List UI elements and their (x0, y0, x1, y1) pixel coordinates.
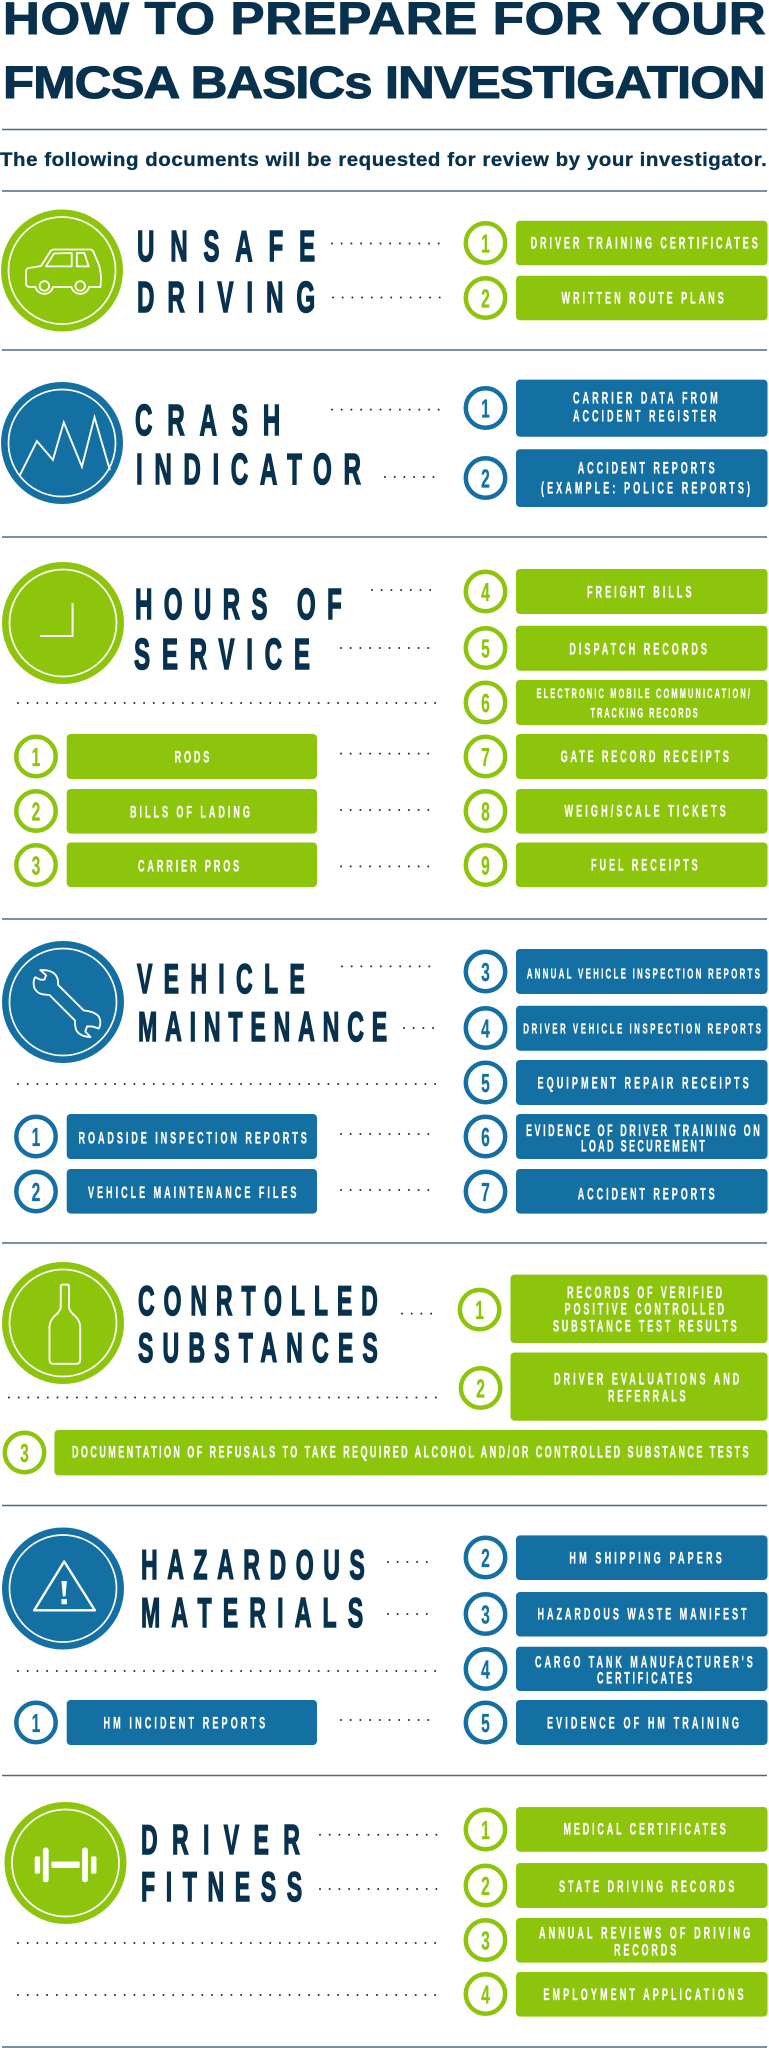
panel: vehicle maintenance (2, 941, 768, 1214)
item 8: weigh/scale tickets (466, 789, 768, 834)
item 3: annual vehicle inspection reports (466, 949, 768, 994)
item 1: driver training certificates (466, 221, 768, 265)
item 2: hm shipping papers: HM SHIPPING PAPERS (569, 1549, 722, 1567)
item 7: gate record receipts: GATE RECORD RECEIPTS (561, 747, 729, 766)
item 3: annual vehicle inspection reports: 3 (481, 958, 490, 987)
item 2: accident reports: 2 (481, 464, 490, 494)
item 3: hazardous waste manifest: 3 (481, 1600, 490, 1630)
item 7: accident reports (466, 1169, 768, 1214)
item 1: roadside inspection reports: 1 (32, 1123, 40, 1152)
item 1: medical certificates: MEDICAL CERTIFICATES (564, 1820, 726, 1838)
heading: driver fitness: DRIVER (141, 1817, 300, 1864)
item 2: vehicle maintenance files: 2 (32, 1178, 40, 1207)
item 4: cargo tank manufacturer's certificates: CARGO TANK MANUFACTURER'S (535, 1653, 753, 1671)
item 2: bills of lading: BILLS OF LADING (130, 803, 250, 821)
item 5: evidence of hm training (466, 1700, 768, 1745)
item 2: vehicle maintenance files (16, 1169, 317, 1214)
heading: crash indicator: CRASH (135, 395, 280, 445)
heading: hours of service: SERVICE (134, 629, 310, 679)
item 1: driver training certificates: 1 (481, 229, 490, 259)
item 2: accident reports: (EXAMPLE: POLICE REPORTS) (541, 479, 750, 497)
heading: vehicle maintenance: MAINTENANCE (138, 1004, 387, 1051)
item 1: records of verified test results: POSITIVE CONTROLLED (564, 1300, 724, 1318)
item 3: carrier pros (16, 842, 317, 887)
item 1: records of verified test results (460, 1275, 768, 1343)
item 3: annual reviews of driving records: RECORDS (614, 1941, 676, 1959)
item 9: fuel receipts (466, 842, 768, 887)
item 5: evidence of hm training: 5 (481, 1709, 490, 1738)
subtitle: The following documents will be requested for review by your investigator. (0, 150, 767, 171)
item 1: roadside inspection reports: ROADSIDE INSPECTION REPORTS (78, 1129, 307, 1147)
item 6: evidence of driver training: EVIDENCE OF DRIVER TRAINING ON (526, 1121, 760, 1140)
item 1: rods: RODS (175, 748, 209, 766)
item 3: documentation of refusals (5, 1430, 768, 1475)
item 6: electronic mobile communication: 6 (481, 689, 490, 718)
item 4: driver vehicle inspection reports (466, 1006, 768, 1051)
item 4: driver vehicle inspection reports: DRIVER VEHICLE INSPECTION REPORTS (523, 1021, 761, 1037)
item 1: records of verified test results: RECORDS OF VERIFIED (567, 1283, 722, 1302)
item 7: gate record receipts: 7 (481, 743, 490, 772)
item 1: rods (16, 734, 317, 779)
item 2: state driving records: 2 (481, 1872, 490, 1901)
item 2: accident reports: ACCIDENT REPORTS (578, 459, 715, 477)
item 5: evidence of hm training: EVIDENCE OF HM TRAINING (547, 1714, 739, 1732)
item 4: cargo tank manufacturer's certificates: 4 (481, 1655, 490, 1685)
item 4: employment applications: 4 (481, 1980, 490, 2010)
item 7: accident reports: 7 (481, 1178, 490, 1207)
heading: crash indicator: INDICATOR (136, 444, 361, 494)
item 2: written route plans: 2 (481, 284, 490, 314)
item 2: bills of lading (16, 789, 317, 834)
item 9: fuel receipts: 9 (481, 851, 490, 881)
item 4: freight bills: 4 (481, 578, 490, 607)
item 2: vehicle maintenance files: VEHICLE MAINTENANCE FILES (88, 1183, 297, 1202)
item 2: state driving records (466, 1863, 768, 1908)
item 3: carrier pros: 3 (32, 851, 40, 881)
panel: unsafe driving (1, 210, 768, 332)
item 8: weigh/scale tickets: WEIGH/SCALE TICKETS (564, 802, 726, 820)
panel: crash indicator (1, 380, 768, 507)
title: FMCSA BASICs INVESTIGATION (3, 57, 766, 108)
item 4: freight bills: FREIGHT BILLS (587, 583, 692, 601)
item 4: employment applications (466, 1972, 768, 2017)
item 2: accident reports (466, 449, 768, 507)
item 2: hm shipping papers: 2 (481, 1544, 490, 1573)
panel: controlled substances (2, 1262, 768, 1475)
item 9: fuel receipts: FUEL RECEIPTS (591, 856, 698, 874)
heading: vehicle maintenance (137, 956, 387, 1051)
item 6: evidence of driver training (466, 1114, 768, 1159)
item 8: weigh/scale tickets: 8 (481, 797, 490, 827)
item 5: dispatch records: DISPATCH RECORDS (569, 639, 707, 658)
heading: hazardous materials: HAZARDOUS (141, 1542, 365, 1589)
heading: hazardous materials (141, 1542, 365, 1637)
item 1: carrier data: ACCIDENT REGISTER (573, 407, 716, 425)
panel: hours of service (2, 562, 768, 887)
item 5: equipment repair receipts (466, 1060, 768, 1105)
item 3: annual reviews of driving records: 3 (481, 1926, 490, 1956)
item 2: bills of lading: 2 (32, 797, 40, 827)
heading: driver fitness: FITNESS (141, 1864, 302, 1911)
heading: vehicle maintenance: VEHICLE (137, 956, 305, 1003)
heading: hours of service: HOURS OF (135, 579, 342, 629)
heading: unsafe driving: DRIVING (137, 272, 315, 322)
item 6: electronic mobile communication: TRACKING RECORDS (590, 706, 698, 721)
item 3: annual reviews of driving records: ANNUAL REVIEWS OF DRIVING (539, 1924, 750, 1942)
item 5: dispatch records: 5 (481, 634, 490, 664)
item 4: cargo tank manufacturer's certificates: CERTIFICATES (597, 1669, 692, 1687)
item 1: carrier data: 1 (481, 394, 490, 424)
item 1: rods: 1 (32, 743, 40, 772)
title (3, 0, 766, 108)
icon: clock (2, 562, 124, 684)
heading: driver fitness (141, 1817, 302, 1911)
item 3: documentation of refusals: 3 (20, 1439, 29, 1468)
icon: dumbbell (4, 1802, 126, 1924)
item 3: hazardous waste manifest (466, 1592, 768, 1636)
item 2: driver evaluations and referrals: 2 (476, 1374, 485, 1404)
heading: unsafe driving (137, 221, 315, 322)
item 6: evidence of driver training: 6 (481, 1123, 490, 1152)
item 6: evidence of driver training: LOAD SECUREMENT (581, 1137, 705, 1155)
icon: jagged line chart (1, 382, 123, 504)
item 4: freight bills (466, 569, 768, 614)
item 2: written route plans (466, 276, 768, 320)
item 1: records of verified test results: 1 (475, 1296, 484, 1325)
item 2: written route plans: WRITTEN ROUTE PLANS (562, 289, 724, 307)
heading: hazardous materials: MATERIALS (141, 1590, 363, 1637)
heading: unsafe driving: UNSAFE (137, 221, 315, 271)
heading: controlled substances (138, 1278, 378, 1372)
item 4: cargo tank manufacturer's certificates (466, 1647, 768, 1691)
panel: hazardous materials (2, 1528, 768, 1745)
panel: driver fitness (4, 1802, 768, 2017)
icon: bottle (2, 1262, 124, 1384)
item 2: state driving records: STATE DRIVING RECORDS (559, 1877, 735, 1896)
item 3: documentation of refusals: DOCUMENTATION OF REFUSALS TO TAKE REQUIRED ALCOHOL AND/OR CONTROLLED SUBSTANCE TESTS (72, 1443, 749, 1461)
item 2: driver evaluations and referrals (461, 1352, 768, 1421)
item 5: equipment repair receipts: EQUIPMENT REPAIR RECEIPTS (538, 1074, 749, 1092)
item 2: hm shipping papers (466, 1535, 768, 1580)
heading: hours of service (134, 579, 342, 679)
icon: warning triangle (2, 1528, 124, 1650)
item 6: electronic mobile communication: ELECTRONIC MOBILE COMMUNICATION/ (536, 687, 750, 702)
item 1: records of verified test results: SUBSTANCE TEST RESULTS (553, 1317, 737, 1335)
item 5: equipment repair receipts: 5 (481, 1069, 490, 1098)
item 2: driver evaluations and referrals: REFERRALS (608, 1387, 686, 1405)
item 5: dispatch records (466, 626, 768, 671)
item 4: driver vehicle inspection reports: 4 (481, 1014, 490, 1044)
item 1: medical certificates: 1 (481, 1816, 490, 1845)
item 4: employment applications: EMPLOYMENT APPLICATIONS (543, 1985, 744, 2004)
item 3: annual vehicle inspection reports: ANNUAL VEHICLE INSPECTION REPORTS (527, 966, 760, 982)
item 6: electronic mobile communication (466, 680, 768, 725)
item 1: roadside inspection reports (16, 1114, 317, 1159)
item 1: hm incident reports (16, 1700, 317, 1745)
item 1: carrier data (466, 380, 768, 437)
icon: wrench (2, 941, 124, 1063)
item 1: hm incident reports: HM INCIDENT REPORTS (104, 1714, 265, 1732)
item 1: driver training certificates: DRIVER TRAINING CERTIFICATES (531, 234, 758, 252)
item 7: accident reports: ACCIDENT REPORTS (578, 1184, 715, 1203)
item 7: gate record receipts (466, 734, 768, 779)
icon: car (1, 210, 123, 332)
item 2: driver evaluations and referrals: DRIVER EVALUATIONS AND (554, 1370, 740, 1388)
item 1: medical certificates (466, 1807, 768, 1852)
item 3: annual reviews of driving records (466, 1918, 768, 1963)
heading: controlled substances: SUBSTANCES (138, 1325, 378, 1372)
item 3: carrier pros: CARRIER PROS (138, 857, 239, 875)
heading: controlled substances: CONRTOLLED (138, 1278, 378, 1325)
item 3: hazardous waste manifest: HAZARDOUS WASTE MANIFEST (538, 1605, 747, 1623)
item 1: carrier data: CARRIER DATA FROM (573, 389, 718, 407)
item 1: hm incident reports: 1 (32, 1709, 40, 1738)
heading: crash indicator (135, 395, 361, 494)
